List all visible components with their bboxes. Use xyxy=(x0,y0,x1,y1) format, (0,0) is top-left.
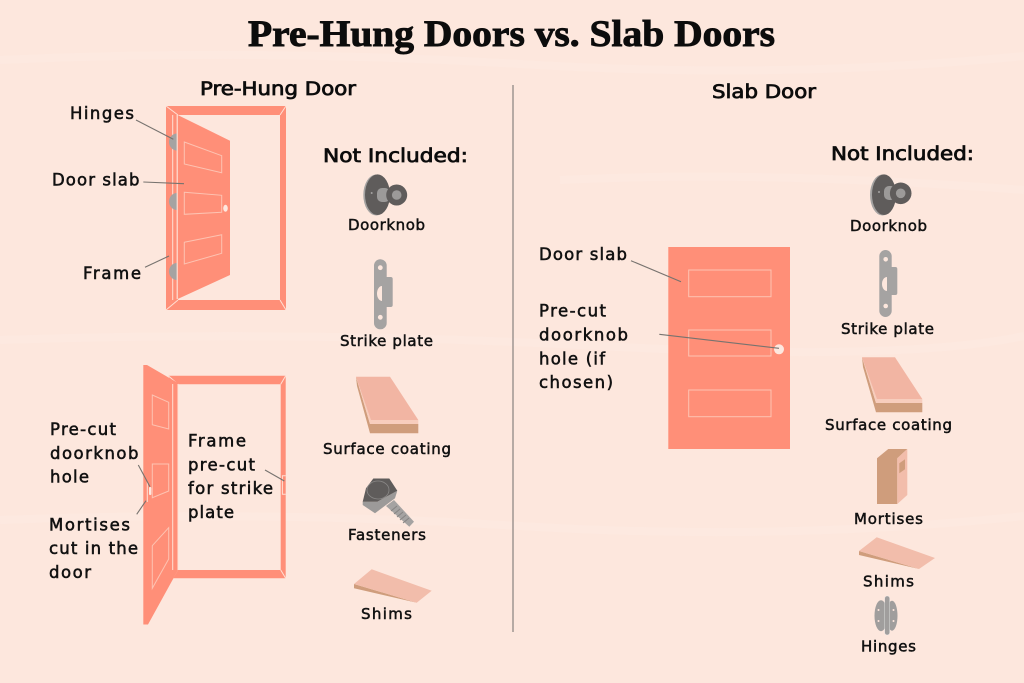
label: frame pre-cut for strike plate: for strike xyxy=(188,479,273,498)
label: pre-cut doorknob hole: hole xyxy=(50,468,89,487)
label: pre-cut doorknob hole: Pre-cut xyxy=(50,420,117,439)
item: strike plate: Strike plate xyxy=(841,320,934,338)
label: mortises cut in the door xyxy=(49,501,146,582)
item: hinges xyxy=(861,596,916,656)
heading: pre-hung door: Pre-Hung Door xyxy=(200,79,356,100)
item: shims: Shims xyxy=(863,573,914,591)
illustration: pre-hung door opening inward xyxy=(166,106,286,310)
label: hinges xyxy=(70,104,173,139)
item: shims xyxy=(859,537,935,591)
item: strike plate xyxy=(841,250,934,338)
label: pre-cut doorknob hole if chosen xyxy=(539,302,779,392)
label: pre-cut doorknob hole xyxy=(50,420,150,487)
label: frame pre-cut for strike plate: Frame xyxy=(188,432,246,451)
item: doorknob xyxy=(850,174,927,235)
label: frame pre-cut for strike plate: pre-cut xyxy=(188,456,256,475)
item: hinges: Hinges xyxy=(861,638,916,656)
item: surface coating: Surface coating xyxy=(323,440,451,458)
item: surface coating xyxy=(825,357,952,434)
panel: pre-hung door xyxy=(49,79,356,624)
illustration: pre-hung door opening outward xyxy=(143,365,286,624)
item: mortises: Mortises xyxy=(854,510,923,528)
title: Pre-Hung Doors vs. Slab Doors xyxy=(248,14,775,55)
label: pre-cut doorknob hole if chosen: Pre-cut xyxy=(539,302,607,321)
label: mortises cut in the door: door xyxy=(49,563,91,582)
label: frame xyxy=(83,256,169,283)
label: door slab xyxy=(52,170,184,190)
label: door slab: Door slab xyxy=(52,170,140,190)
heading: not included: Not Included: xyxy=(831,144,974,165)
item: shims: Shims xyxy=(361,605,412,623)
label: pre-cut doorknob hole if chosen: chosen) xyxy=(539,373,613,392)
label: mortises cut in the door: cut in the xyxy=(49,539,138,558)
item: fasteners xyxy=(348,478,426,544)
label: pre-cut doorknob hole if chosen: hole (if xyxy=(539,349,606,368)
label: hinges: Hinges xyxy=(70,104,134,123)
item: surface coating xyxy=(323,377,451,458)
item: doorknob xyxy=(348,174,425,234)
item: strike plate: Strike plate xyxy=(340,332,433,350)
label: frame pre-cut for strike plate xyxy=(188,432,284,522)
item: shims xyxy=(354,569,432,623)
label: door slab: Door slab xyxy=(539,245,627,264)
label: pre-cut doorknob hole: doorknob xyxy=(50,444,138,463)
panel: slab door xyxy=(539,82,816,449)
label: frame: Frame xyxy=(83,264,141,283)
item: mortises xyxy=(854,449,923,528)
label: mortises cut in the door: Mortises xyxy=(49,515,130,534)
item: surface coating: Surface coating xyxy=(825,416,952,434)
item: strike plate xyxy=(340,259,433,350)
item: doorknob: Doorknob xyxy=(348,216,425,234)
item: doorknob: Doorknob xyxy=(850,217,927,235)
panel: pre-hung not included list xyxy=(323,146,468,623)
label: pre-cut doorknob hole if chosen: doorknob xyxy=(539,326,628,345)
panel: slab not included list xyxy=(825,144,974,656)
heading: not included: Not Included: xyxy=(323,146,468,167)
divider xyxy=(512,85,514,632)
illustration: slab door xyxy=(668,247,790,449)
label: door slab xyxy=(539,245,681,282)
item: fasteners: Fasteners xyxy=(348,526,426,544)
heading: slab door: Slab Door xyxy=(712,82,816,103)
label: frame pre-cut for strike plate: plate xyxy=(188,503,234,522)
